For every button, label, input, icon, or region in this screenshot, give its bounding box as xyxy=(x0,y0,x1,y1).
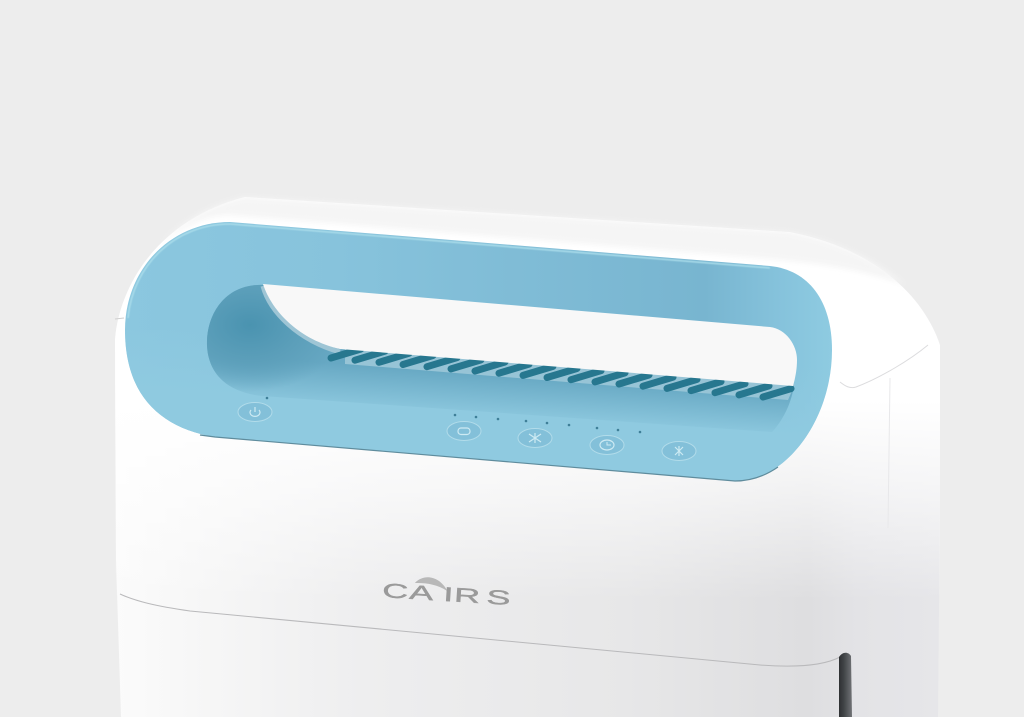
hole surround sliver xyxy=(263,286,340,352)
icon: timer button xyxy=(590,436,624,454)
hood top surface xyxy=(160,197,905,285)
ring rim highlight xyxy=(128,224,770,318)
icon: logo leaf xyxy=(415,576,448,591)
body seams xyxy=(115,318,928,666)
control deck lighter tone xyxy=(126,345,826,480)
water tank window xyxy=(839,653,852,717)
handle opening xyxy=(263,284,797,386)
icon: mode button xyxy=(447,422,481,440)
indicator dots xyxy=(266,397,641,433)
recess behind the vents xyxy=(207,284,793,428)
ring base xyxy=(125,222,832,481)
vent rib strip xyxy=(345,349,795,400)
blue handle ring xyxy=(120,222,840,490)
ring lower edge xyxy=(200,435,778,481)
icon: power button xyxy=(238,402,272,422)
vent slats xyxy=(331,349,791,397)
appliance body xyxy=(115,197,940,717)
logo: CAIRS: CAIRS xyxy=(382,580,511,610)
icon: fan button xyxy=(518,428,552,448)
icon: light button xyxy=(662,442,696,460)
product illustration: CAIRS appliance top xyxy=(115,197,940,717)
